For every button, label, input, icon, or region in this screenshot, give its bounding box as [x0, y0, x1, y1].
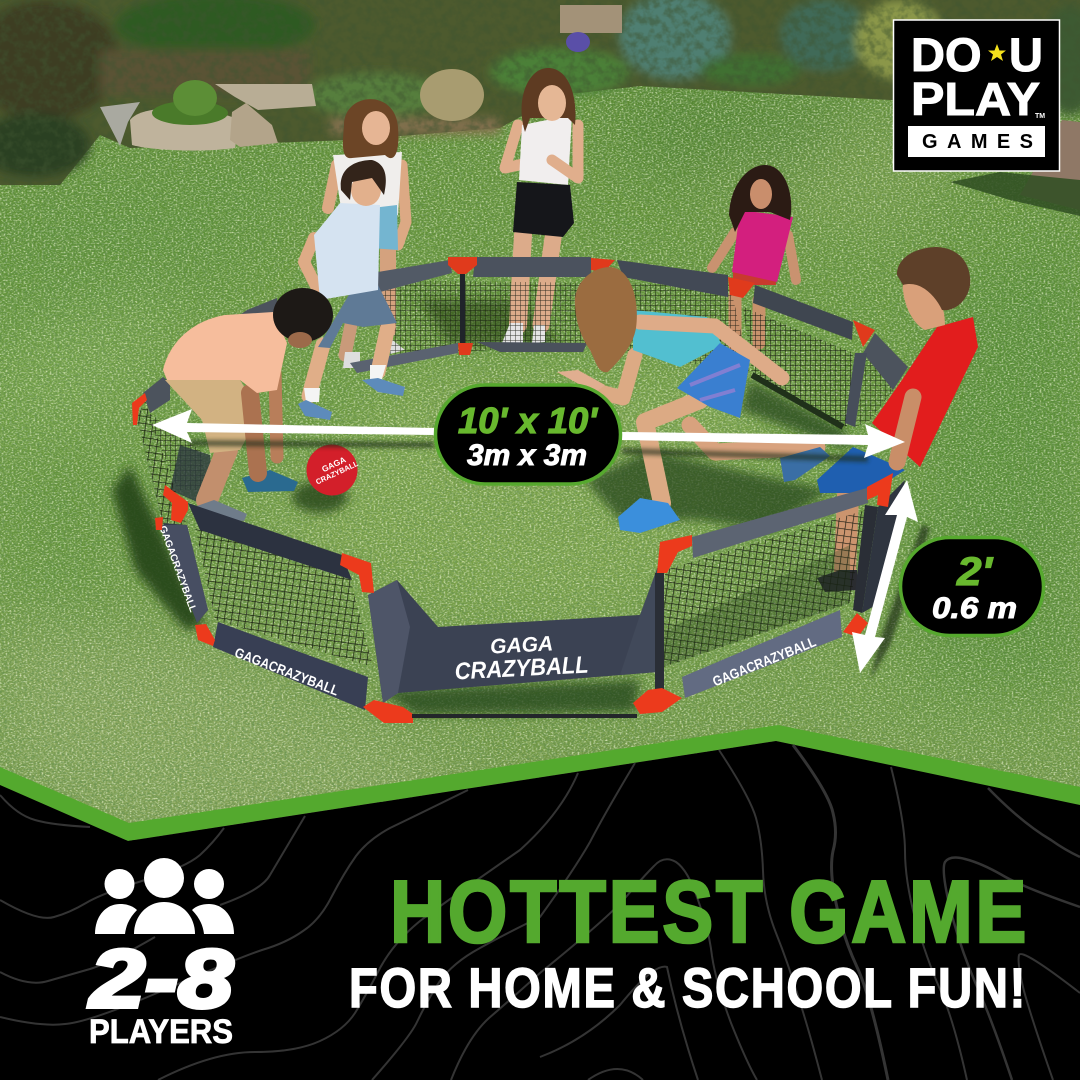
game ball	[306, 444, 360, 496]
kid: boy in light blue polo	[298, 160, 405, 420]
stone planter	[100, 80, 316, 151]
near fence of the arena: GAGACRAZYBALL	[710, 633, 818, 689]
contour lines	[0, 745, 1080, 1080]
far left side panel	[137, 400, 187, 525]
arrow: width dimension left	[152, 409, 434, 443]
badge: 2 ft height: 2'	[956, 550, 994, 594]
kid: girl bending in teal top	[557, 267, 830, 533]
left panel mesh	[195, 527, 373, 667]
centre banner logo: CRAZYBALL	[454, 652, 589, 685]
near fence of the arena: GAGACRAZYBALL	[157, 524, 198, 614]
ground bar	[412, 714, 637, 718]
near fence of the arena: GAGACRAZYBALL	[233, 644, 341, 699]
red corners	[340, 553, 374, 593]
badge: 2 ft height: 0.6 m	[932, 592, 1017, 625]
ground shadows	[112, 300, 850, 715]
badge: 10 x 10 width: 3m x 3m	[467, 439, 587, 472]
kid: back centre teen in black shorts	[502, 68, 578, 343]
kid: back left girl in white shirt	[328, 99, 406, 368]
centre banner logo	[454, 632, 589, 685]
badge: 10 x 10 width	[436, 385, 620, 484]
game ball: GAGA	[320, 454, 347, 474]
logo: Do U Play Games	[894, 20, 1060, 171]
posts	[655, 573, 664, 690]
left panel bottom sleeve	[213, 622, 368, 710]
far fence of the arena	[143, 257, 908, 510]
right panel mesh	[663, 510, 866, 667]
photo background: lawn	[0, 0, 1080, 840]
left panel top sleeve	[188, 503, 352, 580]
right panel top sleeve	[692, 488, 868, 558]
players label: PLAYERS	[89, 1013, 233, 1051]
kid: boy in red shirt	[817, 247, 978, 592]
logo: Do U Play Games: U	[1009, 28, 1043, 81]
kid: back right girl in pink	[712, 165, 796, 345]
centre banner logo: GAGA	[490, 632, 554, 659]
player count: 2-8	[88, 932, 234, 1025]
game ball: CRAZYBALL	[314, 459, 360, 486]
arrow: height dimension	[852, 480, 918, 673]
footer panel	[0, 741, 1080, 1080]
logo: Do U Play Games: GAMES	[922, 131, 1033, 153]
badge: 2 ft height	[900, 538, 1044, 636]
badge: 10 x 10 width: 10' x 10'	[458, 400, 598, 441]
logo: Do U Play Games: DO	[911, 28, 982, 81]
boulder and tree shadow at right	[950, 120, 1080, 216]
arrow shadows	[190, 440, 930, 680]
near fence of the arena	[132, 393, 905, 723]
kid: bending boy in peach	[163, 288, 333, 521]
centre banner	[368, 566, 660, 703]
logo: Do U Play Games: TM	[1035, 113, 1045, 120]
right panel bottom sleeve	[682, 610, 842, 698]
arrow: width dimension right	[622, 424, 905, 458]
players icon	[95, 858, 234, 934]
green edge of footer	[0, 725, 1080, 841]
garden shrubs background	[0, 0, 1080, 190]
logo: Do U Play Games: PLAY	[911, 73, 1040, 125]
